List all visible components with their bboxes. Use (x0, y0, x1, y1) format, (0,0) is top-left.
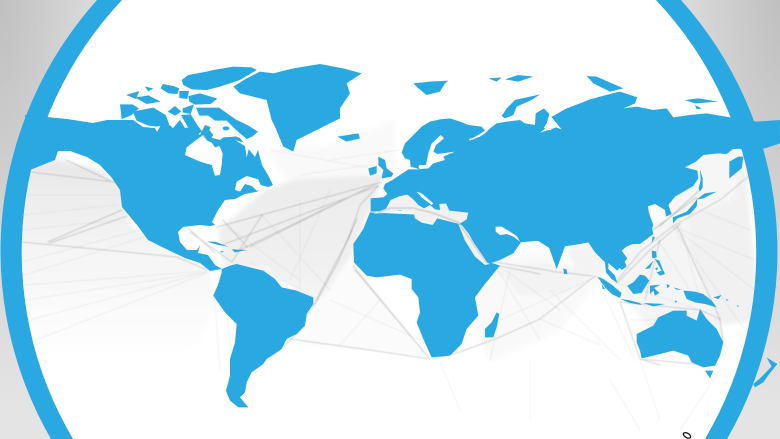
Honshu (673, 198, 697, 223)
ocean shading (22, 153, 756, 362)
Baltic, Mediterranean, Red Sea, Persian Gulf (373, 135, 520, 265)
Java (620, 299, 642, 305)
Australia (637, 309, 723, 367)
Cuba and Caribbean islands (207, 242, 247, 253)
Franz Josef Land (488, 77, 502, 82)
Northern Russia and Chukotka (413, 75, 780, 227)
Madagascar (485, 312, 499, 337)
New Zealand (753, 357, 777, 387)
lanes over inland seas (378, 190, 700, 263)
Philippines (652, 251, 657, 258)
Novaya Zemlya (502, 94, 540, 118)
South and Southeast Asia (520, 199, 777, 387)
Borneo (627, 275, 649, 294)
Europe and Western Asia (368, 118, 550, 264)
Taiwan (652, 236, 655, 243)
South America (213, 212, 500, 407)
main lanes (22, 160, 750, 366)
Svalbard (413, 81, 448, 95)
Sumatra (597, 277, 622, 298)
shipping lanes (22, 150, 755, 430)
faint lanes (22, 150, 755, 430)
small black mark at bottom edge (682, 431, 692, 439)
Iceland (337, 133, 360, 142)
North and Central America (25, 115, 273, 271)
Tasmania (705, 371, 713, 378)
Great Britain (378, 157, 393, 178)
Sri Lanka (563, 268, 567, 274)
Ob Gulf (540, 115, 562, 133)
Hokkaido (697, 192, 717, 199)
Africa south of the Mediterranean (353, 212, 500, 357)
Severnaya Zemlya (587, 76, 623, 92)
shipping lane density (22, 150, 756, 430)
East Asia (590, 123, 780, 270)
New Guinea (683, 291, 717, 307)
Moluccas (667, 284, 670, 288)
New Siberian Islands (685, 98, 718, 103)
Sakhalin (729, 157, 743, 178)
Ireland (368, 166, 377, 176)
Sulawesi (650, 285, 661, 296)
Greenland (233, 64, 362, 152)
Hudson Bay and Foxe Basin (185, 120, 270, 192)
Canadian Arctic islands (120, 67, 258, 143)
world map landmasses (25, 64, 780, 407)
Melanesia (713, 295, 722, 299)
Tatar strait island chain (699, 169, 703, 192)
Lesser Sunda Islands (643, 303, 665, 306)
